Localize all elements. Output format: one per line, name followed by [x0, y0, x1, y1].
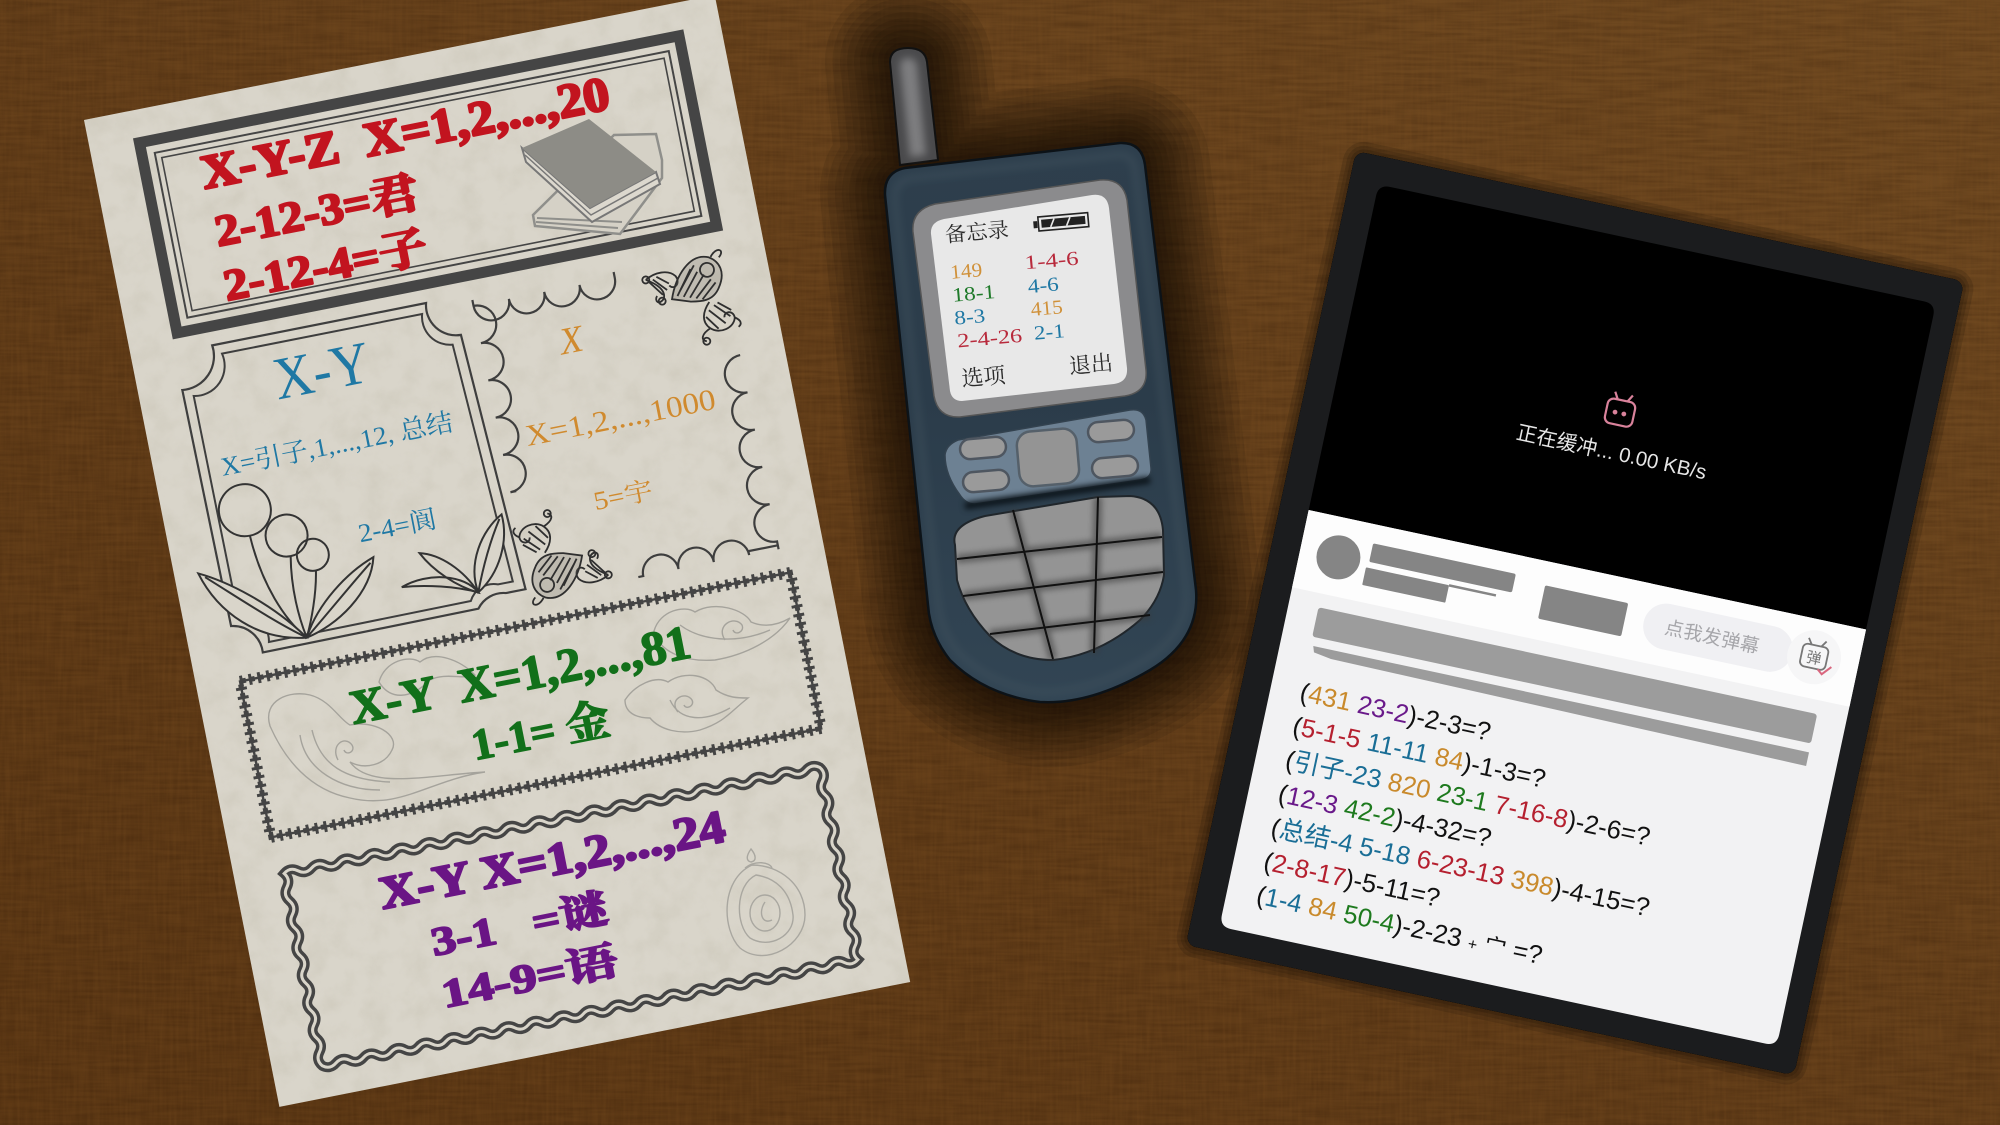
- text: options softkey: 选项: [961, 362, 1008, 391]
- text: green example: 1-1= 金: [467, 695, 614, 770]
- text: memo column 1: [949, 256, 1023, 353]
- text: orange example: 5=宇: [591, 476, 656, 516]
- panel: purple wavy frame: [281, 764, 861, 1069]
- avatar placeholder: [1312, 531, 1365, 583]
- icon: stack of books: [522, 119, 662, 234]
- text: blue rule heading: X-Y: [268, 329, 376, 412]
- icon: pink tv logo: [1604, 391, 1638, 428]
- text: question lines: (总结-4 5-18 6-23-13 398)-4-15=?: [1268, 813, 1652, 922]
- text: blue example: 2-4=阆: [356, 504, 439, 548]
- phone navigation cluster: [945, 410, 1151, 506]
- text: memo column 2: [1024, 248, 1086, 345]
- icon: spiral swirl: [727, 849, 805, 956]
- icon: danmaku toggle: 弹: [1805, 649, 1823, 669]
- title placeholder: [1312, 607, 1817, 744]
- phone: [885, 48, 1196, 702]
- phone keypad: [954, 496, 1164, 660]
- text: blue rule range: X=引子,1,...,12, 总结: [218, 407, 455, 482]
- text: orange heading: X: [554, 317, 588, 364]
- meta placeholder: [1362, 566, 1496, 613]
- icon: corner ornament bottom left: [510, 500, 615, 606]
- text: question lines: (431 23-2)-2-3=?: [1297, 679, 1493, 747]
- panel: green cross-stitched frame: [240, 572, 821, 837]
- text: memo column 1: 18-1: [951, 281, 996, 307]
- text: memo title: 备忘录: [944, 218, 1010, 247]
- text: purple rule heading: X-Y X=1,2,...,24: [375, 801, 729, 919]
- danmaku input: 点我发弹幕: [1663, 617, 1761, 658]
- danmaku input: [1639, 599, 1797, 676]
- icon: flower plant: [183, 462, 386, 656]
- icon: corner ornament top right: [639, 248, 744, 355]
- text: memo column 2: 2-1: [1033, 320, 1066, 345]
- icon: battery: [1033, 213, 1089, 231]
- name placeholder: [1369, 543, 1516, 592]
- tablet casing: [1186, 151, 1964, 1075]
- paper sheet with puzzle rules: [84, 0, 910, 1107]
- text: orange rule range: X=1,2,...,1000: [523, 383, 718, 453]
- text: memo column 2: 415: [1030, 296, 1064, 321]
- panel: video player: [1309, 184, 1936, 630]
- text: memo column 1: 8-3: [953, 305, 986, 330]
- phone body: [885, 143, 1196, 702]
- text: question lines: (12-3 42-2)-4-32=?: [1276, 780, 1494, 853]
- text: red rule heading: X-Y-Z X=1,2,...,20: [197, 67, 614, 200]
- panel: page body: [1219, 510, 1866, 1046]
- phone screen: [931, 195, 1127, 401]
- text: question lines: (2-8-17)-5-11=?: [1261, 848, 1442, 913]
- text: exit softkey: 退出: [1068, 350, 1114, 379]
- tablet: [1186, 151, 1964, 1075]
- text: buffering status: 正在缓冲... 0.00 KB/s: [1514, 421, 1709, 484]
- text: question lines: (5-1-5 11-11 84)-1-3=?: [1290, 712, 1548, 794]
- subtitle placeholder: [1310, 646, 1809, 766]
- text: green rule heading: X-Y X=1,2,...,81: [345, 616, 695, 735]
- panel: blue plaque frame: [155, 295, 528, 662]
- follow button placeholder: [1538, 585, 1628, 636]
- tablet soft shadow: [1186, 151, 1964, 1075]
- icon: clouds behind green text: [269, 607, 790, 801]
- text: purple example 1: 3-1 =谜: [427, 885, 614, 965]
- phone soft shadow: [885, 48, 1196, 702]
- text: red example 1: 2-12-3=君: [211, 168, 423, 256]
- panel: red double-line frame: [139, 36, 717, 333]
- text: question lines: (引子-23 820 23-1 7-16-8)-2-6=?: [1283, 746, 1653, 852]
- text: question lines: [1254, 679, 1681, 990]
- text: memo column 1: 149: [949, 259, 983, 284]
- panel: info strip: [1292, 510, 1866, 707]
- text: memo column 2: 1-4-6: [1024, 248, 1080, 274]
- text: memo column 1: 2-4-26: [956, 325, 1023, 352]
- text: memo column 2: 4-6: [1027, 273, 1060, 298]
- icon: grass leaves: [392, 514, 516, 607]
- phone screen bezel: [913, 180, 1146, 417]
- icon: danmaku toggle: [1782, 625, 1846, 689]
- text: purple example 2: 14-9=语: [437, 938, 622, 1017]
- panel: orange stamp frame: [467, 248, 787, 606]
- phone antenna: [890, 48, 938, 165]
- text: question lines: (1-4 84 50-4)-2-23 + 宀 =?: [1254, 882, 1545, 970]
- text: red example 2: 2-12-4=子: [219, 222, 432, 311]
